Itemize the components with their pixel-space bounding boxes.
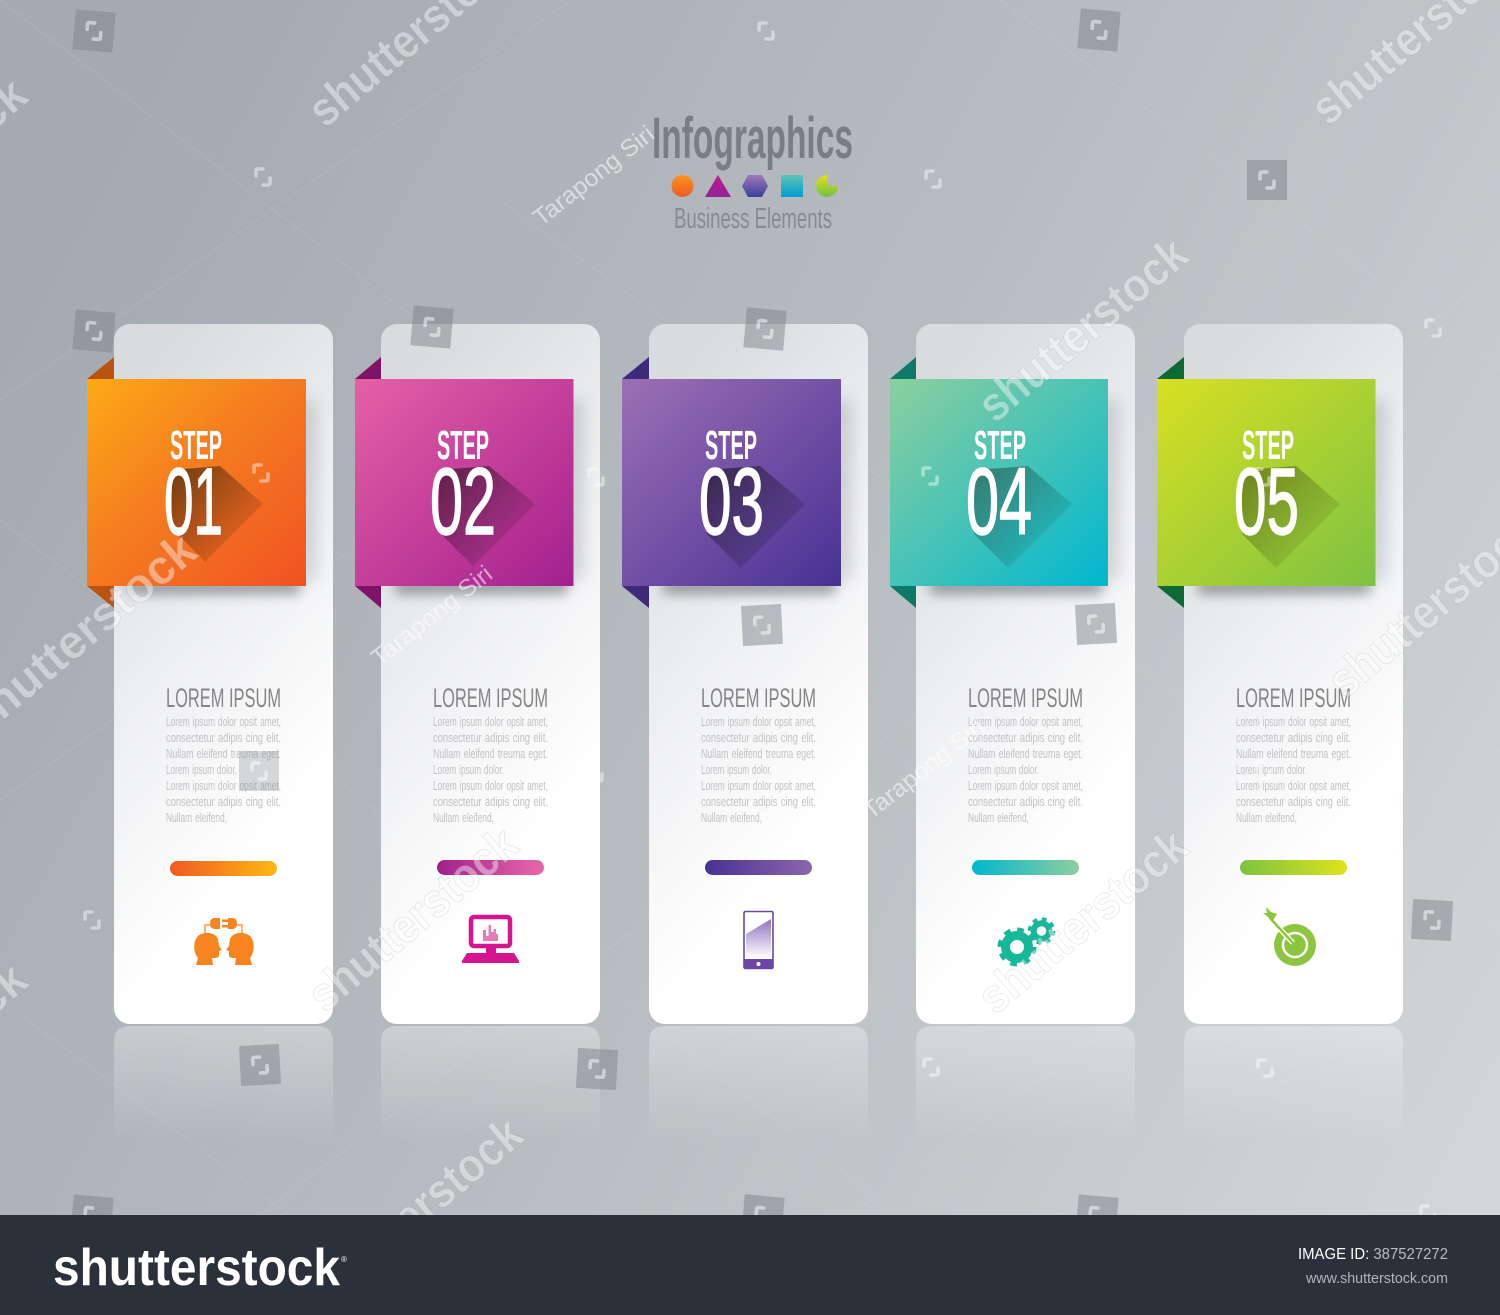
watermark: author credit: Tarapong Siri [366,561,498,672]
body text 4: Lorem ipsum dolor. [968,762,1039,777]
body text 4: consectetur adipis cing elit. [968,794,1083,809]
fold bottom 1 [87,586,114,608]
subtitle: Business Elements [674,203,832,235]
reflection 1 [114,1026,333,1142]
icon: laptop with chart [462,917,519,963]
column 4 [890,324,1135,1142]
body text 1: consectetur adipis cing elit. [166,730,281,745]
fold top 2 [355,357,381,379]
body text 4: consectetur adipis cing elit. [968,730,1083,745]
accent bar 1 [170,861,277,876]
accent bar 2 [437,860,544,875]
column 5: STEP [1242,422,1294,468]
body text 2: Lorem ipsum dolor opsit amet, [433,778,548,793]
icon: two heads with plug [194,918,254,965]
step number 4: 04 [966,449,1032,555]
square shadow 3 [663,400,851,594]
card 2 [381,324,600,1024]
heading 5: LOREM IPSUM [1236,683,1351,713]
fold bottom 2 [355,586,381,608]
column 1: STEP [170,422,222,468]
watermark: shutterstock text: shutterstock [298,817,528,1022]
title: Infographics [652,106,853,171]
long shadow 5 [1242,466,1340,568]
body text 4: Lorem ipsum dolor opsit amet, [968,714,1083,729]
reflection 5 [1184,1026,1403,1142]
body text 1: Lorem ipsum dolor opsit amet, [166,778,281,793]
column 3 [622,324,868,1142]
fold top 1 [87,357,114,379]
watermark: author credit [366,121,990,825]
header: Infographics title block [652,106,853,235]
square 5 [1157,379,1376,586]
body text 5: Lorem ipsum dolor opsit amet, [1236,714,1351,729]
body text 2: Lorem ipsum dolor. [433,762,504,777]
fold bottom 4 [890,586,916,608]
icon: target with dart [1263,907,1316,966]
heading 2: LOREM IPSUM [433,683,548,713]
column 2 [355,324,600,1142]
body text 3 [701,714,816,825]
long shadow 3 [707,466,805,568]
body text 5: Nullam eleifend treuma eget. [1236,746,1351,761]
long shadow 1 [172,466,263,562]
body text 5: Lorem ipsum dolor. [1236,762,1307,777]
square 1 [87,379,306,586]
watermark: author credit: Tarapong Siri [528,121,660,232]
body text 3: Lorem ipsum dolor opsit amet, [701,714,816,729]
fold bottom 3 [622,586,649,608]
fold bottom 5 [1157,586,1184,608]
accent bar 4 [972,860,1079,875]
column 2: STEP [437,422,489,468]
step number 3: 03 [699,449,764,555]
body text 2: consectetur adipis cing elit. [433,730,548,745]
body text 4 [968,714,1083,825]
heading 4: LOREM IPSUM [968,683,1083,713]
column 1 [87,324,333,1142]
shape row [672,175,838,197]
reflection 3 [649,1026,868,1142]
body text 4: Lorem ipsum dolor opsit amet, [968,778,1083,793]
footer logo: shutterstock [53,1239,340,1297]
watermark: author credit: Tarapong Siri [858,714,990,825]
body text 2: Nullam eleifend treuma eget. [433,746,548,761]
accent bar 5 [1240,860,1347,875]
body text 2: Nullam eleifend, [433,810,494,825]
body text 2 [433,714,548,825]
long shadow 4 [974,466,1072,568]
body text 1: Nullam eleifend treuma eget. [166,746,281,761]
website: www.shutterstock.com [1305,1271,1448,1287]
heading 3: LOREM IPSUM [701,683,816,713]
card 5 [1184,324,1403,1024]
column 4: STEP [974,422,1026,468]
icon: smartphone [744,912,773,969]
watermark: shutterstock text: shutterstock [968,819,1198,1024]
watermark: shutterstock text: shutterstock [303,1107,533,1312]
reflection 2 [381,1026,600,1142]
fold top 3 [622,357,649,379]
fold top 5 [1157,357,1184,379]
body text 1: consectetur adipis cing elit. [166,794,281,809]
square shadow 1 [128,400,316,594]
body text 4: Nullam eleifend, [968,810,1029,825]
footer bar [0,1215,1500,1315]
column 3: STEP [705,422,757,468]
heading 1: LOREM IPSUM [166,683,281,713]
accent bar 3 [705,860,812,875]
body text 3: consectetur adipis cing elit. [701,794,816,809]
reflection 4 [916,1026,1135,1142]
body text 1: Lorem ipsum dolor. [166,762,237,777]
square 3 [622,379,841,586]
square 2 [355,379,574,586]
icon: gears [1000,919,1054,964]
step number 2: 02 [430,449,496,555]
square shadow 5 [1198,400,1386,594]
body text 1: Lorem ipsum dolor opsit amet, [166,714,281,729]
body text 5: consectetur adipis cing elit. [1236,794,1351,809]
body text 1: Nullam eleifend, [166,810,227,825]
square shadow 4 [930,400,1118,594]
body text 2: consectetur adipis cing elit. [433,794,548,809]
long shadow 2 [439,466,535,566]
step number 1: 01 [164,449,223,555]
body text 3: Nullam eleifend, [701,810,762,825]
step number 5: 05 [1234,449,1299,555]
square 4 [890,379,1108,586]
card 1 [114,324,333,1024]
image id: IMAGE ID: 387527272 [1298,1246,1448,1263]
fold top 4 [890,357,916,379]
square shadow 2 [395,400,583,594]
body text 5: Lorem ipsum dolor opsit amet, [1236,778,1351,793]
registered mark: ® [341,1255,347,1264]
body text 3: Nullam eleifend treuma eget. [701,746,816,761]
card 3 [649,324,868,1024]
body text 1 [166,714,281,825]
body text 2: Lorem ipsum dolor opsit amet, [433,714,548,729]
body text 3: consectetur adipis cing elit. [701,730,816,745]
body text 4: Nullam eleifend treuma eget. [968,746,1083,761]
watermark: shutterstock text: shutterstock [968,227,1198,432]
card 4 [916,324,1135,1024]
body text 3: Lorem ipsum dolor opsit amet, [701,778,816,793]
body text 5 [1236,714,1351,825]
body text 5: Nullam eleifend, [1236,810,1297,825]
body text 3: Lorem ipsum dolor. [701,762,772,777]
body text 5: consectetur adipis cing elit. [1236,730,1351,745]
column 5 [1157,324,1403,1142]
